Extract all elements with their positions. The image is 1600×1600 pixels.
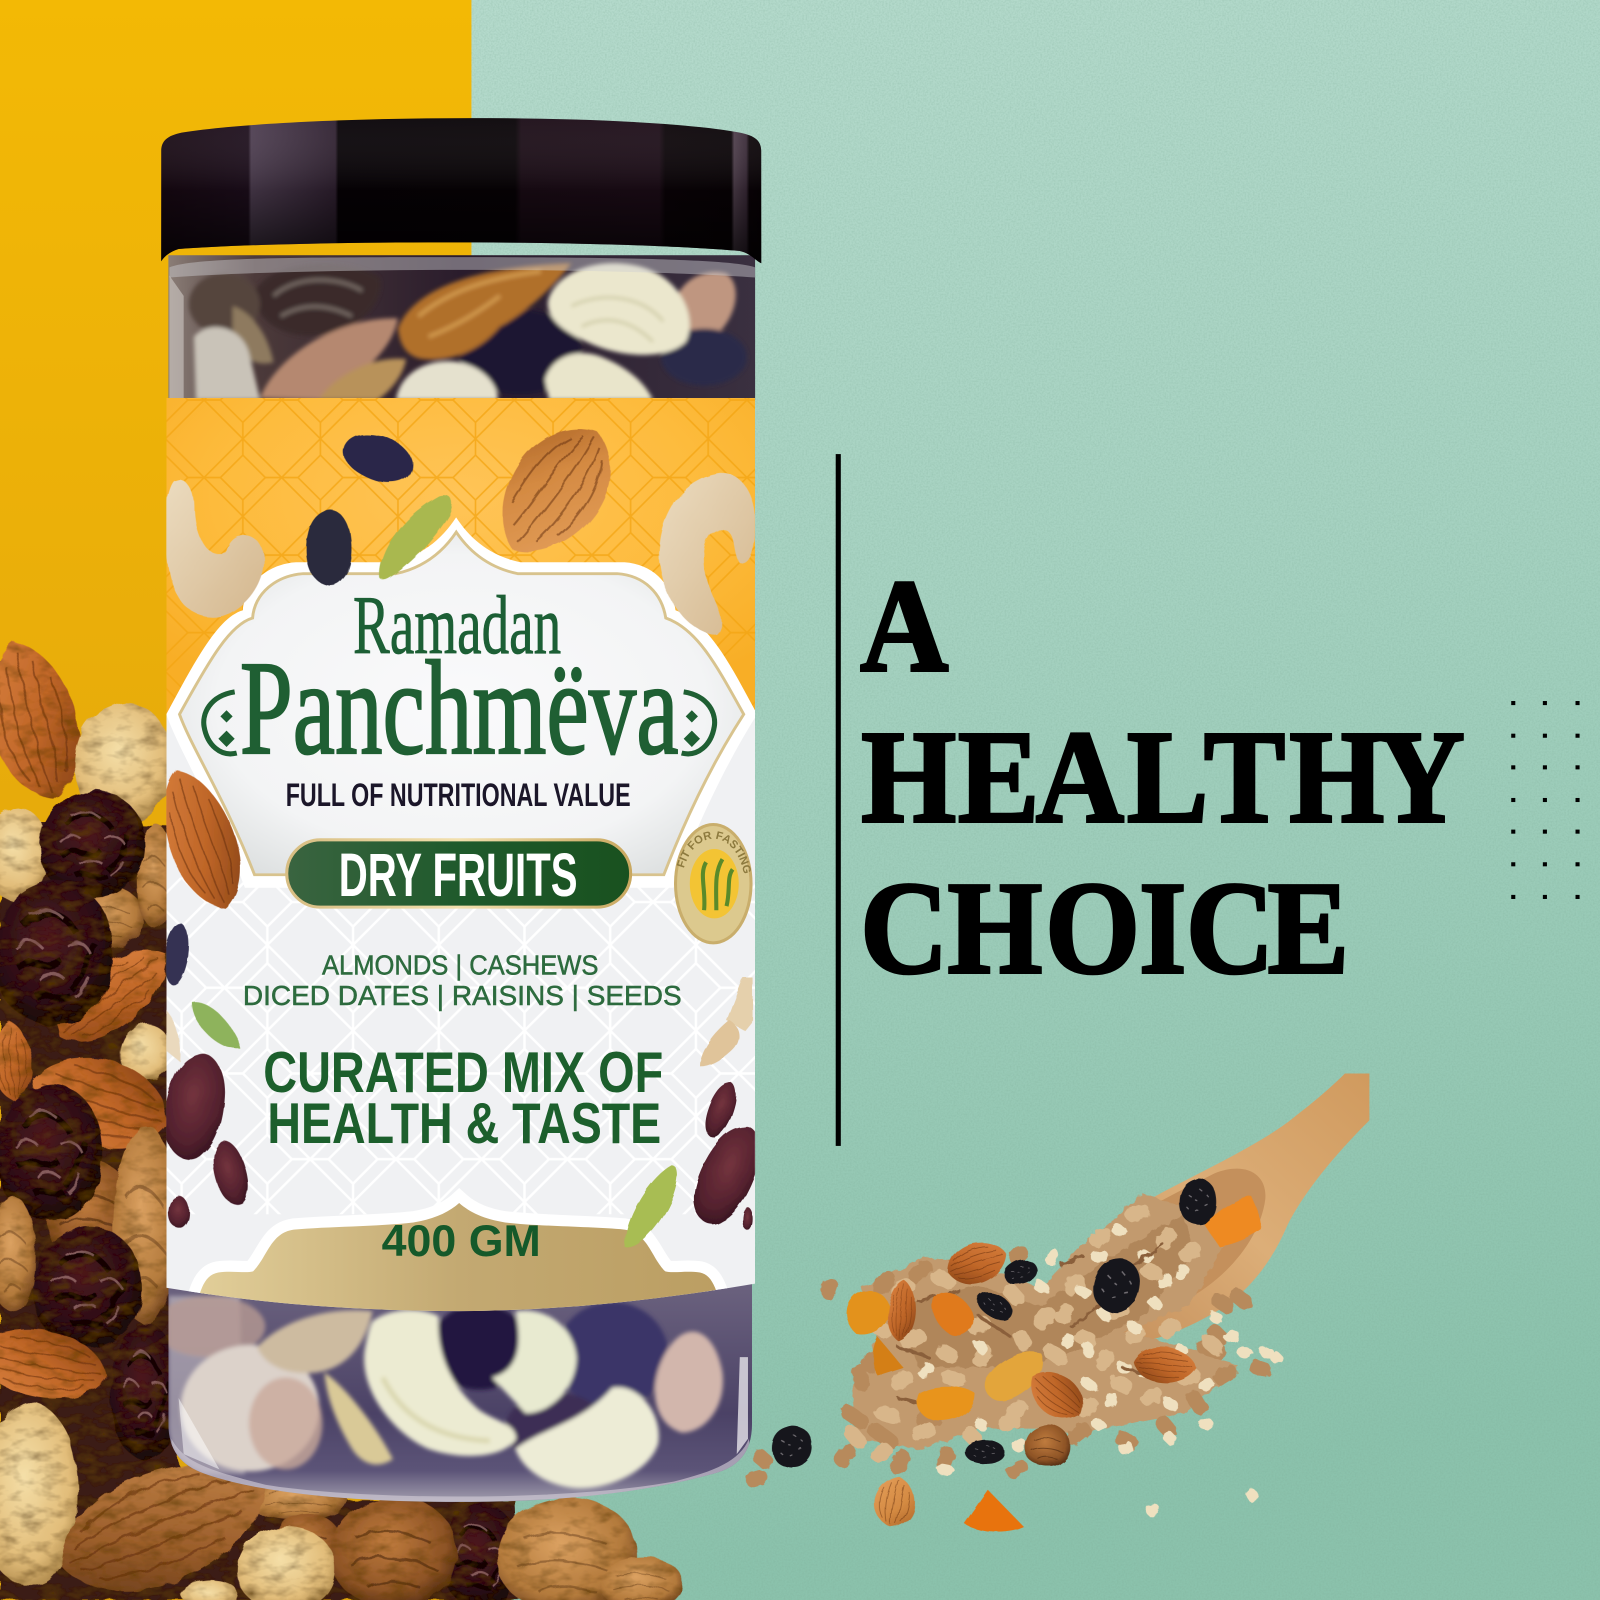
headline: A healthy choice: CHOICE bbox=[860, 854, 1349, 1002]
ingredient list bbox=[243, 949, 682, 1011]
jar lower glass with contents bbox=[153, 1276, 755, 1505]
brand name Panchmeva: Panchmëva bbox=[240, 634, 679, 783]
headline: A healthy choice: HEALTHY bbox=[861, 703, 1465, 851]
jar upper glass with contents bbox=[166, 255, 757, 400]
dry fruits pill: DRY FRUITS bbox=[339, 841, 578, 909]
tagline: FULL OF NUTRITIONAL VALUE bbox=[286, 776, 631, 813]
fit for fasting badge: FIT FOR FASTING bbox=[676, 831, 751, 874]
dried fruit and nuts on granola bbox=[771, 1179, 1262, 1532]
dry fruits pill bbox=[287, 840, 631, 909]
curated mix headline: HEALTH & TASTE bbox=[267, 1092, 661, 1156]
label yellow area bbox=[166, 398, 755, 724]
jar bbox=[161, 118, 762, 1502]
jar lid bbox=[161, 118, 761, 263]
brand name Panchmeva bbox=[201, 658, 718, 756]
nut pile on lower left bbox=[0, 632, 682, 1600]
wooden spoon with granola bbox=[753, 1073, 1369, 1532]
dot grid decoration bbox=[1511, 701, 1580, 899]
white plaque with gold outline bbox=[166, 517, 757, 888]
weight: 400 GM bbox=[382, 1215, 541, 1266]
gold arch for weight bbox=[192, 1203, 724, 1327]
background: yellow panel bbox=[0, 0, 471, 1600]
label decoration: nuts and raisins bbox=[145, 406, 773, 1247]
curated mix headline: CURATED MIX OF bbox=[263, 1041, 663, 1105]
curated mix headline bbox=[263, 1041, 663, 1156]
ingredient list: ALMONDS | CASHEWS bbox=[322, 949, 598, 980]
granola pile bbox=[753, 1194, 1278, 1510]
spoon bbox=[1069, 1073, 1369, 1345]
label white area bbox=[166, 714, 755, 1327]
label on jar bbox=[166, 398, 756, 1367]
fit for fasting badge bbox=[674, 823, 753, 944]
ingredient list: DICED DATES | RAISINS | SEEDS bbox=[243, 980, 682, 1011]
vertical divider line bbox=[836, 454, 841, 1146]
headline: A healthy choice bbox=[860, 552, 1465, 1002]
headline: A healthy choice: A bbox=[860, 552, 948, 700]
paper grain overlay bbox=[471, 0, 1600, 1600]
brand name Ramadan: Ramadan bbox=[353, 579, 561, 672]
